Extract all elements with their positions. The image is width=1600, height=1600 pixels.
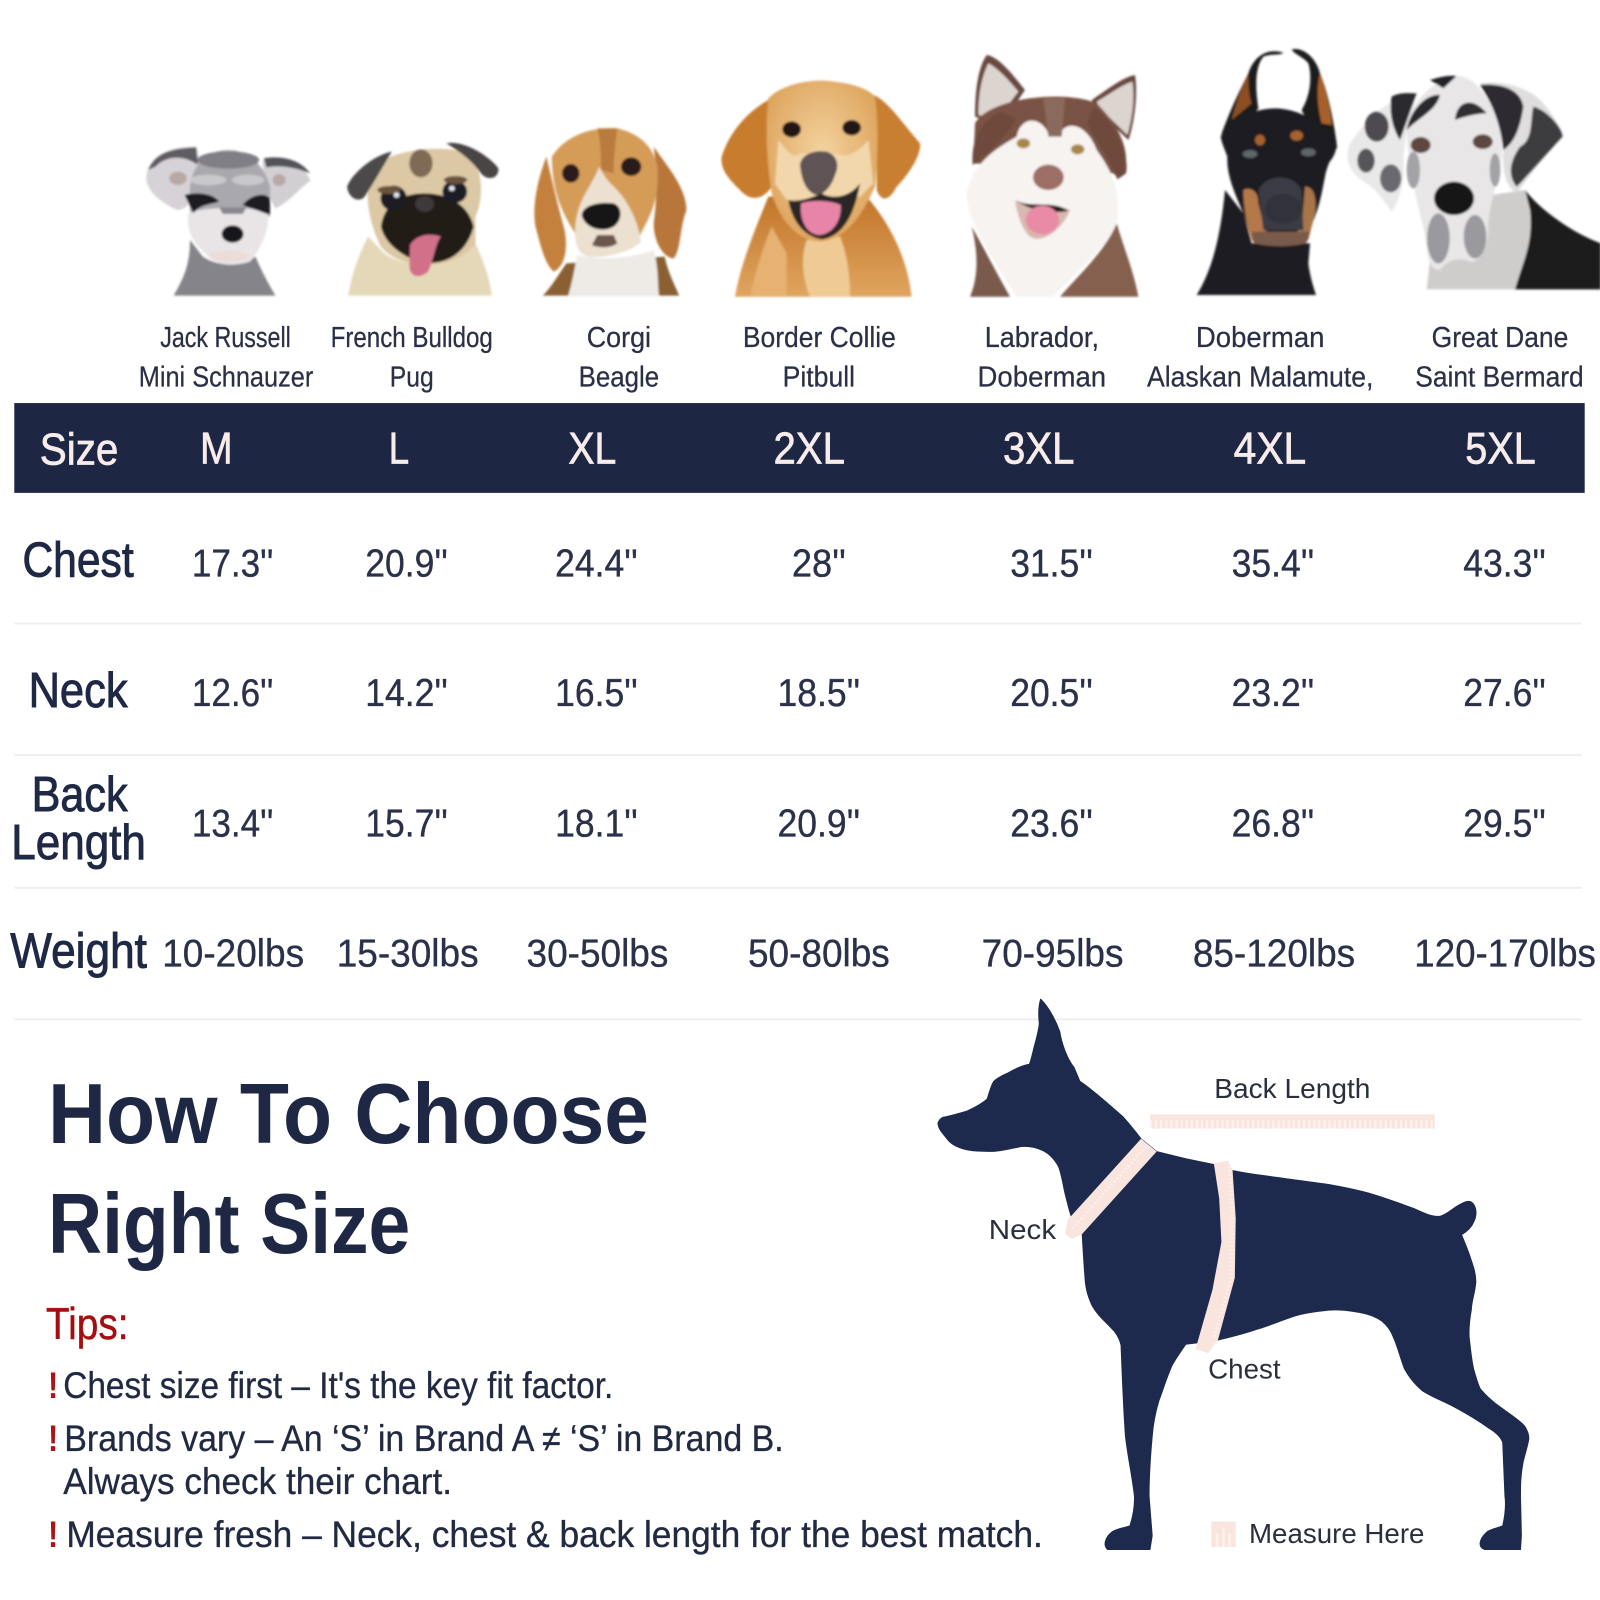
value: XL chest: 24.4'' — [555, 543, 638, 586]
dog: great dane — [1347, 76, 1600, 289]
row: weight — [10, 924, 1596, 978]
legend swatch: measure here — [1211, 1521, 1236, 1547]
header: Size: Size — [40, 423, 118, 474]
dog: mini schnauzer — [146, 147, 311, 296]
header: 2XL: 2XL — [773, 422, 845, 473]
tape: chest — [1196, 1161, 1236, 1353]
row label: Back: Back — [32, 768, 128, 822]
value: M chest: 17.3'' — [192, 543, 273, 586]
tip 1 marker: ! — [48, 1365, 58, 1406]
breed label: Pug: Pug — [390, 362, 434, 394]
legend label: measure here: Measure Here — [1249, 1518, 1424, 1549]
tip 3 marker: ! — [48, 1514, 58, 1555]
tip 1 text: Chest size first – It's the key fit factor. — [63, 1365, 613, 1406]
breed label: Labrador: Labrador, — [985, 322, 1099, 354]
dog silhouette with tapes — [938, 999, 1529, 1550]
dog: doberman — [1197, 49, 1337, 295]
value: 2XL chest: 28'' — [792, 543, 846, 586]
value: 2XL back: 20.9'' — [778, 803, 860, 846]
dog: pug — [347, 143, 498, 296]
value: L neck: 14.2'' — [365, 672, 448, 715]
heading: how to choose right size — [48, 1066, 649, 1272]
tips label: Tips: — [46, 1298, 129, 1349]
tape: neck — [1065, 1139, 1157, 1239]
value: 2XL weight: 50-80lbs — [748, 932, 890, 975]
breed label: Doberman 3XL: Doberman — [978, 362, 1106, 394]
tip 2 marker: ! — [48, 1418, 58, 1459]
value: 5XL chest: 43.3'' — [1463, 543, 1546, 586]
breed label: Beagle: Beagle — [579, 362, 659, 394]
header: 5XL: 5XL — [1465, 422, 1536, 473]
value: XL neck: 16.5'' — [555, 672, 638, 715]
value: 4XL chest: 35.4'' — [1232, 543, 1314, 586]
row label: Chest: Chest — [22, 534, 134, 588]
dog: golden retriever — [721, 81, 920, 297]
value: 5XL neck: 27.6'' — [1463, 672, 1546, 715]
value: 3XL back: 23.6'' — [1010, 803, 1093, 846]
value: 3XL weight: 70-95lbs — [982, 932, 1123, 975]
row label: Length: Length — [11, 816, 146, 870]
value: L back: 15.7'' — [365, 803, 448, 846]
value: XL weight: 30-50lbs — [527, 932, 668, 975]
value: L chest: 20.9'' — [365, 543, 448, 586]
breed labels — [139, 322, 1584, 394]
breed label: Alaskan Malamute: Alaskan Malamute, — [1147, 362, 1373, 394]
value: M weight: 10-20lbs — [162, 932, 304, 975]
value: 3XL chest: 31.5'' — [1010, 543, 1093, 586]
value: M back: 13.4'' — [192, 803, 273, 846]
value: 3XL neck: 20.5'' — [1010, 672, 1093, 715]
value: 4XL neck: 23.2'' — [1232, 672, 1314, 715]
header: XL: XL — [568, 422, 616, 473]
breed label: Corgi: Corgi — [587, 322, 651, 354]
header: 3XL: 3XL — [1003, 422, 1074, 473]
value: 4XL weight: 85-120lbs — [1193, 932, 1355, 975]
row label: Weight: Weight — [10, 924, 147, 978]
tip 2 second line: Always check their chart. — [63, 1461, 452, 1502]
heading line 2: Right Size — [48, 1176, 410, 1272]
value: L weight: 15-30lbs — [337, 932, 479, 975]
row: chest — [22, 534, 1546, 588]
tip 2 text: Brands vary – An ‘S’ in Brand A ≠ ‘S’ in Brand B. — [64, 1418, 784, 1459]
header: L: L — [389, 422, 409, 473]
value: M neck: 12.6'' — [192, 672, 273, 715]
value: XL back: 18.1'' — [555, 803, 638, 846]
size header bar — [14, 403, 1585, 493]
row label: Neck: Neck — [29, 664, 128, 718]
breed label: Jack Russell: Jack Russell — [160, 322, 291, 354]
breed label: Doberman 4XL: Doberman — [1196, 322, 1324, 354]
breed label: Pitbull: Pitbull — [783, 362, 855, 394]
breed label: Mini Schnauzer: Mini Schnauzer — [139, 362, 314, 394]
value: 4XL back: 26.8'' — [1232, 803, 1314, 846]
label: chest: Chest — [1208, 1354, 1281, 1385]
tape: back length — [1150, 1114, 1435, 1129]
value: 5XL back: 29.5'' — [1463, 803, 1546, 846]
dog photo row — [146, 49, 1600, 297]
row: back length — [11, 768, 1546, 870]
tip 3 text: Measure fresh – Neck, chest & back length for the best match. — [66, 1514, 1043, 1555]
breed label: Border Collie: Border Collie — [743, 322, 896, 354]
heading line 1: How To Choose — [48, 1066, 649, 1162]
breed label: Great Dane: Great Dane — [1432, 322, 1568, 354]
measuring diagram: dog silhouette — [938, 999, 1529, 1550]
value: 2XL neck: 18.5'' — [778, 672, 860, 715]
tips block — [46, 1298, 1043, 1555]
header: M: M — [200, 422, 233, 473]
row: neck — [29, 664, 1546, 718]
header: 4XL: 4XL — [1234, 422, 1306, 473]
dog: husky — [967, 55, 1138, 297]
label: neck: Neck — [989, 1214, 1056, 1245]
dog: beagle — [534, 128, 686, 296]
breed label: French Bulldog: French Bulldog — [331, 322, 493, 354]
breed label: Saint Bermard: Saint Bermard — [1415, 362, 1584, 394]
label: back length: Back Length — [1214, 1073, 1370, 1104]
